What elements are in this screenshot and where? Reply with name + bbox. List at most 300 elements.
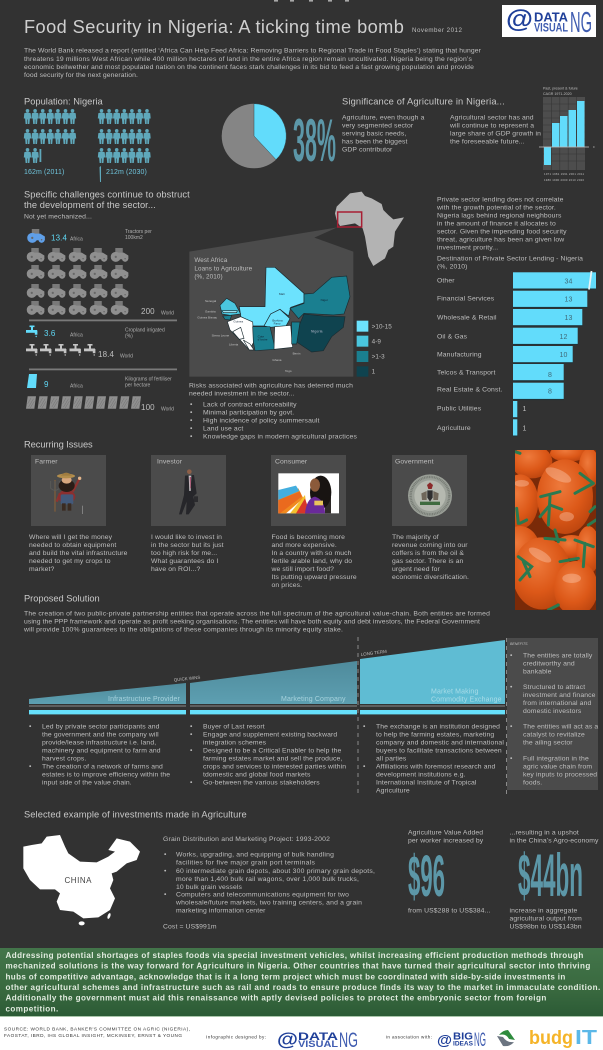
panel: conclusion band: hubs of competitive advantage, acknowledge that is it a long term project which must be coordinated with side-by-side investments in [6,972,566,981]
text: farmer quote: Where will I get the money [29,534,113,541]
bar chart: lending by sector: Telcos & Transport [437,370,495,377]
text: marketing company details: • [190,780,193,786]
text: source [4,1026,190,1038]
text: grain distribution project: Cost = US$991m [163,924,217,930]
text: $96 [408,844,445,909]
text: risks deterring investment: • [190,434,193,440]
text: farmer quote: and build the vital infrastructure [29,550,128,557]
map labels: Liberia [229,342,239,346]
bar chart: lending by sector: 34 [564,278,573,286]
map labels: Mali [279,292,285,296]
text: from 288 to 384: from US$288 to US$384... [408,908,491,914]
text: commodity exchange details: development institutions e.g. [376,772,466,778]
panel: consumer: Consumer [275,458,308,466]
text: infrastructure provider details: the government and the company will [42,732,159,738]
text: private sector lending: with the growth potential of the sector. [436,204,556,212]
text: risks deterring investment [189,382,357,440]
panel title: (%, 2010) [194,274,223,281]
pictogram: population 2011 [24,109,76,163]
stat: tractors world: 200 [141,307,155,316]
text: infrastructure provider details: • [29,764,32,770]
text: marketing company details: • [190,748,193,754]
icon: Africa fertiliser bag [27,374,37,388]
map labels: Ghana [272,358,282,362]
heading: population: Population: Nigeria [24,96,104,106]
map: China [23,835,140,925]
text: agriculture value added: per worker increased by [408,838,484,844]
heading: recurring issues: Recurring Issues [24,440,93,450]
stat: cropland irrigated: Africa [70,332,83,338]
stat: fertiliser world: 100 [141,403,155,412]
label: quick wins: QUICK WINS [174,675,201,682]
subheading: not yet mechanized: Not yet mechanized... [24,214,92,220]
text: government quote: gas sector. There is an [392,558,463,565]
intro text [24,48,482,79]
text: risks deterring investment: Minimal participation by govt. [203,410,294,416]
text: marketing company details: farming estates market and sell the produce, [203,756,342,762]
bar chart: lending by sector: Manufacturing [437,351,482,358]
text: agricultural GDP growth: the foreseeable future... [450,138,525,146]
text: agriculture contributor: has been the biggest [342,138,408,146]
panel: government [392,455,467,526]
text: 38% [293,107,336,174]
text: grain distribution project: Grain Distribution and Marketing Project: 1993-2002 [163,836,330,843]
map countries [220,267,350,352]
text: agricultural GDP growth: Agricultural sector has and [450,114,534,122]
text: private sector lending: sector. Given the impending food security [437,228,567,236]
text: investor quote: in the sector but its just [151,542,224,549]
text: commodity exchange details: The exchange is an institution designed [376,724,500,730]
bar chart: CAGR 1971-2020: 1971 1981 1991 2001 2011 [544,172,584,176]
heading: significance: Significance of Agriculture in Nigeria... [342,96,505,106]
text: proposed solution summary: The creation of two public-private partnership entities that operate across the full spectrum of the agricultural value-chain. Both entities are formed [24,610,490,618]
text: source: SOURCE: WORLD BANK, BANKER'S COMMITTEE ON AGRIC (NIGERIA), [4,1026,190,1032]
pictogram: world taps [26,344,95,356]
logo: BudgIT: budg [529,1028,573,1049]
panel: farmer: Farmer [35,458,58,466]
text: consumer quote [270,534,357,589]
text: infrastructure provider details: estates is to improve efficiency within the [42,772,170,778]
text: aggregate output increase: agricultural output from [510,916,582,922]
text: marketing company details: tdomestic and global food markets [203,772,311,778]
text: private sector lending: Nigeria lags behind regional neighbours [437,212,562,220]
map labels: Benin [293,352,301,356]
map legend: 1 [372,368,376,375]
panel: conclusion band: mechanized solutions is the way forward for Agriculture in Nigeria. Other countries that have turned their agricultural sector into thriving [6,962,590,971]
text: marketing company details: Designed to be a Critical Enabler to help the [203,748,341,754]
text: marketing company details: Engage and supplement existing backward [203,732,337,738]
wedge: marketing company [190,661,357,714]
panel: benefits: from international and [523,700,591,707]
text: risks deterring investment: Risks associated with agriculture has deterred much [189,382,353,390]
text: risks deterring investment: • [190,410,193,416]
text: designed by: Infographic designed by: [206,1034,266,1040]
stat: fertiliser: Kilograms of fertiliser [125,376,172,382]
logo: Big Ideas NG: @ [437,1032,452,1049]
label: 162m 2011: 162m (2011) [24,169,64,176]
map labels: Nigeria [311,330,323,334]
text: farmer quote: needed to get my crops to [29,558,111,565]
text: aggregate output increase: increase in aggregate [510,908,577,914]
text: marketing company details: • [190,732,193,738]
text: investor quote [151,534,224,573]
wedge: market making commodity exchange: Market Making [431,688,478,696]
map legend: 4-9 [372,338,381,345]
text: resulting upshot [510,830,599,844]
title: Food Security in Nigeria: A ticking time bomb [24,17,404,37]
chart title: destination of lending: Destination of Private Sector Lending - Nigeria [437,256,583,262]
text: infrastructure provider details: • [29,724,32,730]
map labels: Niger [321,298,328,302]
panel: benefits: • [510,724,513,730]
bar chart: lending by sector: Real Estate & Const. [437,387,502,394]
bar chart: CAGR 1971-2020: Past, present & future [543,86,578,90]
text: agricultural GDP growth [449,114,541,146]
image: tomatoes [515,450,596,610]
heading: specific challenges: Specific challenges continue to obstruct [24,190,190,200]
text: commodity exchange details: all parties [376,756,407,762]
text: in association with: in association with: [386,1034,432,1040]
panel title [194,257,253,281]
panel: conclusion band: Addressing potential shortages of staples foods via special investment vehicles, whilst increasing efficient production methods through [6,951,584,960]
stat: cropland irrigated: Cropland irrigated [125,328,165,334]
text: marketing company details: crops and services to interested parties within [203,764,346,770]
text: agricultural GDP growth: large share of GDP growth in [450,130,541,138]
bar chart: lending by sector: 13 [564,296,573,304]
text: infrastructure provider details: harvest crops. [42,756,86,762]
bar chart: lending by sector: Agriculture [437,425,471,432]
map labels [197,292,328,373]
bar chart: CAGR 1971-2020: 1980 1990 2000 2010 2020 [544,178,584,182]
text: grain distribution project: • [164,868,167,875]
text: risks deterring investment: Land use act [203,426,243,432]
panel: West Africa loans map [189,227,353,377]
stat: cropland irrigated: 3.6 [44,329,56,338]
text: grain distribution project: • [164,892,167,898]
bar chart: CAGR 1971-2020 [539,86,595,182]
panel: benefits: key inputs to processed [523,772,597,778]
panel: government: Government [395,458,434,466]
logo: Big Ideas NG: BIG [453,1032,473,1042]
wedge: infrastructure provider [29,683,186,714]
text: agriculture contributor: GDP contributor [342,146,393,154]
text: agriculture value added [408,830,484,844]
logo: Data Visual NG: VISUAL [534,22,568,34]
text: aggregate output increase: US$98bn to US$143bn [510,924,582,930]
text: consumer quote: Food is becoming more [272,534,345,541]
map labels: Burkina [272,319,283,323]
panel: benefits: • [510,756,513,762]
panel: benefits: BENEFITS [510,642,528,646]
label: long term: LONG TERM [361,649,387,657]
text: grain distribution project: 10 bulk grain vessels [176,884,242,891]
map labels: Sierra Leone [212,333,230,337]
text: private sector lending: threat, agriculture has been an given low [437,236,564,244]
text: grain distribution project: Works, upgrading, and equipping of bulk handling [176,852,334,858]
text: farmer quote [29,534,128,573]
text: agriculture value added: Agriculture Value Added [408,830,483,836]
map legend: >10-15 [372,323,392,330]
panel: benefits: the ailing sector [523,740,573,746]
logo: Data Visual NG footer: @ [277,1030,298,1050]
top ornaments [274,0,349,2]
text: private sector lending: in the amount of finance it allocates to [437,220,556,228]
label: 212m 2030: 212m (2030) [106,169,147,176]
text: marketing company details: Go-between the various stakeholders [203,780,320,786]
text: agriculture contributor [342,114,425,154]
panel: conclusion band: other agricultural schemes and infrastructure such as rail and roads to ensure produce finds its way to the market in immaculate condition. [6,983,600,992]
stat: tractors world: World [161,310,174,316]
panel: consumer [271,455,346,526]
text: marketing company details: • [190,724,193,730]
logo: Big Ideas NG [437,1030,486,1050]
text: grain distribution project: facilities for five major grain port terminals [176,860,315,866]
text: consumer quote: In a country with so much [272,550,352,557]
text: risks deterring investment: • [190,426,193,432]
stat: cropland irrigated: (%) [125,334,133,340]
stat: fertiliser: 9 [44,380,49,389]
text: aggregate output increase [510,908,582,930]
wedge: market making commodity exchange: Commodity Exchange [431,696,502,704]
stat: tractors Africa [51,229,152,242]
bar chart: CAGR 1971-2020: CAGR 1971-2020 [543,92,572,96]
panel: conclusion band: Additionally the government must aid this renaissance with aptly devised policies to protect the embryonic sector from foreign [6,994,546,1003]
bar chart: lending by sector: Other [437,278,455,285]
text: proposed solution summary: will provide 100% guarantees to the obligations of these companies through its minority equity stake. [23,626,343,634]
icon: green swirl [497,1030,515,1046]
bar chart: lending by sector: 12 [560,334,568,341]
logo: Data Visual NG: DATA [534,10,568,24]
heading: selected example: Selected example of investments made in Agriculture [24,810,247,820]
pictogram: population 2030 [98,109,151,182]
panel: benefits: • [510,684,513,691]
text: marketing company details: Buyer of Last resort [203,724,265,730]
text: commodity exchange details: • [363,724,366,730]
text: commodity exchange details: International Institute of Tropical [376,780,477,786]
panel: benefits: domestic investors [523,708,582,715]
logo: Big Ideas NG: IDEAS [453,1042,473,1048]
intro text: economic bellwether and most populated nation on the continent faces stark challenges in its bid to feed a fast growing population and provide [24,64,474,71]
map labels: Guinea [233,320,243,324]
map labels: Guinea Bissau [197,316,218,320]
icon: Africa tap [26,326,37,337]
text: grain distribution project: • [164,852,167,858]
text: marketing company details [190,724,346,786]
stat: fertiliser world: World [161,406,174,412]
map legend [357,321,392,377]
panel: benefits: Structured to attract [523,684,585,691]
wedge: infrastructure provider: Infrastructure Provider [108,696,181,703]
text: risks deterring investment: • [190,418,193,424]
map labels: Faso [274,322,281,326]
panel: benefits: catalyst to revitalize [523,732,585,738]
text: investor quote: have on ROI...? [151,566,201,573]
map labels: Gambia [205,309,216,313]
chart title: destination of lending: (%, 2010) [437,264,468,270]
text: commodity exchange details: company and domestic and international [376,740,504,746]
text: agriculture contributor: serving basic needs, [342,130,406,138]
icon: farmer [51,473,83,514]
bar chart: lending by sector: 8 [548,372,552,379]
text: private sector lending [436,196,567,252]
bar chart: lending by sector: Oil & Gas [437,333,468,340]
text: investor quote: What guarantees do I [151,558,218,565]
text: consumer quote: and more expensive. [272,542,337,549]
panel: benefits [507,638,598,790]
text: proposed solution summary [23,610,490,634]
text: commodity exchange details: Affiliations with foremost research and [376,764,496,770]
text: grain distribution project [163,836,375,930]
text: infrastructure provider details: machinery and equipment to farm and [42,748,161,754]
text: commodity exchange details [363,724,504,794]
text: government quote: The majority of [392,534,439,541]
intro text: threatens 19 millions West African while 400 million hectares of land in the entire Africa region remain uncultivated. Nigeria being the region’s [24,56,472,63]
text: commodity exchange details: to help the farming estates, marketing [376,732,494,738]
stat: tractors Africa: 13.4 [51,234,67,242]
stat: fertiliser: Africa [70,384,83,390]
map labels: d'Ivoire [258,338,268,342]
panel title: West Africa [194,257,228,264]
bar chart: lending by sector: 10 [560,352,568,359]
map: Africa locator [335,192,404,266]
panel: benefits: foods. [523,780,542,786]
text: grain distribution project: more than 1,400 bulk rail wagons, over 1,000 bulk trucks, [176,876,359,883]
panel: investor: Investor [157,458,183,466]
panel: benefits: creditworthy and [523,660,575,668]
text: private sector lending: investment prority... [437,244,498,252]
panel: benefits: The entities will act as a [523,724,598,730]
text: government quote [392,534,469,581]
text: commodity exchange details: • [363,764,366,770]
bar chart: lending by sector: 1 [522,406,527,413]
wedge: marketing company: Marketing Company [281,696,346,703]
text: farmer quote: market? [29,566,54,573]
map labels: Togo [285,369,292,373]
pictogram: world fertiliser bags [26,396,141,409]
panel title: Loans to Agriculture [194,266,253,273]
image: shopper with bags [278,473,339,513]
text: proposed solution summary: using the PPP framework and operate as profit seeking organisations. The entities will have both equity and debt investors, the Federal Government [24,618,480,626]
panel: conclusion band: competition. [6,1004,58,1013]
intro text: food security for the next generation. [24,72,138,79]
stat: cropland world: World [120,354,133,360]
wedge: market making commodity exchange [360,640,505,714]
panel: conclusion band [0,948,603,1017]
panel: benefits: The entities are totally [523,652,593,660]
logo: Data Visual NG footer: VISUAL [298,1039,339,1049]
text: government quote: revenue coming into our [392,542,468,549]
text: risks deterring investment: needed investment in the sector... [189,390,295,398]
text: resulting upshot: ...resulting in a upshot [510,830,579,836]
icon: investor [179,469,198,514]
text: risks deterring investment: • [190,402,193,408]
stat: tractors Africa: Tractors per [125,229,152,235]
logo: Data Visual NG footer [277,1029,358,1050]
panel: benefits: Full integration in the [523,756,589,762]
text: government quote: coffers is from the oil & [392,550,464,557]
heading: proposed solution: Proposed Solution [24,594,100,604]
stat: cropland irrigated [44,328,165,340]
panel: benefits: • [510,652,513,660]
text: investor quote: I would like to invest in [151,534,222,541]
date: November 2012 [412,27,462,34]
text: infrastructure provider details: Led by private sector participants and [42,724,160,730]
bar chart: lending by sector: 1 [522,426,527,432]
text: farmer quote: needed to obtain equipment [29,542,116,549]
text: grain distribution project: Computers and telecommunications equipment for two [176,892,349,898]
logo: Data Visual NG: @ [506,6,533,34]
panel: benefits: investment and finance [523,692,596,699]
map labels: Senegal [205,299,217,303]
heading: specific challenges: the development of the sector... [24,200,156,210]
bar chart: lending by sector: 8 [548,389,552,396]
stat: fertiliser [44,376,172,390]
text: risks deterring investment: High incidence of policy summersault [203,418,320,424]
stat: tractors Africa: 100km2 [125,235,143,241]
text: source: FAOSTAT, IBRD, IHS GLOBAL INSIGHT, MCKINSEY, ERNST & YOUNG [4,1033,182,1038]
logo: Data Visual NG footer: DATA [298,1031,338,1043]
panel: farmer [31,455,106,526]
bar chart: lending by sector: Financial Services [437,296,495,303]
panel: benefits: agric value chain from [523,764,592,770]
logo: BudgIT [529,1027,597,1049]
text: government quote: urgent need for [392,566,441,573]
text: consumer quote: we still import food? [270,566,334,573]
stat: fertiliser world [141,403,174,412]
text: investor quote: too high risk for me... [151,550,217,557]
stat: tractors Africa: Africa [70,236,83,242]
text: consumer quote: on prices. [272,582,302,589]
text: government quote: economic diversification. [392,574,469,581]
footer background [0,1017,603,1050]
text: consumer quote: Its putting upward pressure [272,574,357,581]
bar chart: lending by sector: Public Utilities [437,406,482,413]
map: China: CHINA [64,876,92,885]
text: commodity exchange details: Agriculture [376,788,410,794]
text: agriculture contributor: very segmented sector [342,122,414,130]
pictogram: world tractors [27,248,128,315]
icon: Africa tractor [27,229,45,243]
text: agricultural GDP growth: will continue to represent a [449,122,534,130]
diagram: phased entities wedge [29,637,506,794]
text: consumer quote: fertile arable land, why do [272,558,352,565]
text: infrastructure provider details [29,724,170,786]
icon: Nigerian seal [408,474,452,517]
text: private sector lending: Private sector lending does not correlate [437,196,564,204]
text: infrastructure provider details: input side of the value chain. [42,780,132,786]
text: marketing company details: integration schemes [203,740,267,746]
bar chart: lending by sector [437,271,596,437]
text: agriculture contributor: Agriculture, even though a [342,114,425,122]
intro text: The World Bank released a report (entitled ‘Africa Can Help Feed Africa: Removing Barriers to Regional Trade in Food Staples’) stating that hunger [24,48,482,54]
panel: benefits: bankable [523,668,552,676]
text: grain distribution project: marketing information center [176,908,266,914]
logo: BudgIT: IT [575,1027,597,1049]
panel: investor [151,455,226,526]
map labels: Cote [258,335,264,339]
stat: tractors world [141,307,174,316]
text: risks deterring investment: Lack of contract enforceability [203,402,297,408]
heading: specific challenges [24,190,190,210]
logo: Data Visual NG [502,5,596,39]
stat: fertiliser: per hectare [125,382,151,388]
stat: cropland world: 18.4 [98,350,114,359]
text: grain distribution project: wholesale/future markets, two training centers, and a grain [175,900,362,906]
text: resulting upshot: in the China’s Agro-economy [510,838,599,844]
chart title: destination of lending [437,256,583,270]
text: risks deterring investment: Knowledge gaps in modern agricultural practices [203,434,357,440]
pie chart: agriculture share of GDP [222,104,286,168]
